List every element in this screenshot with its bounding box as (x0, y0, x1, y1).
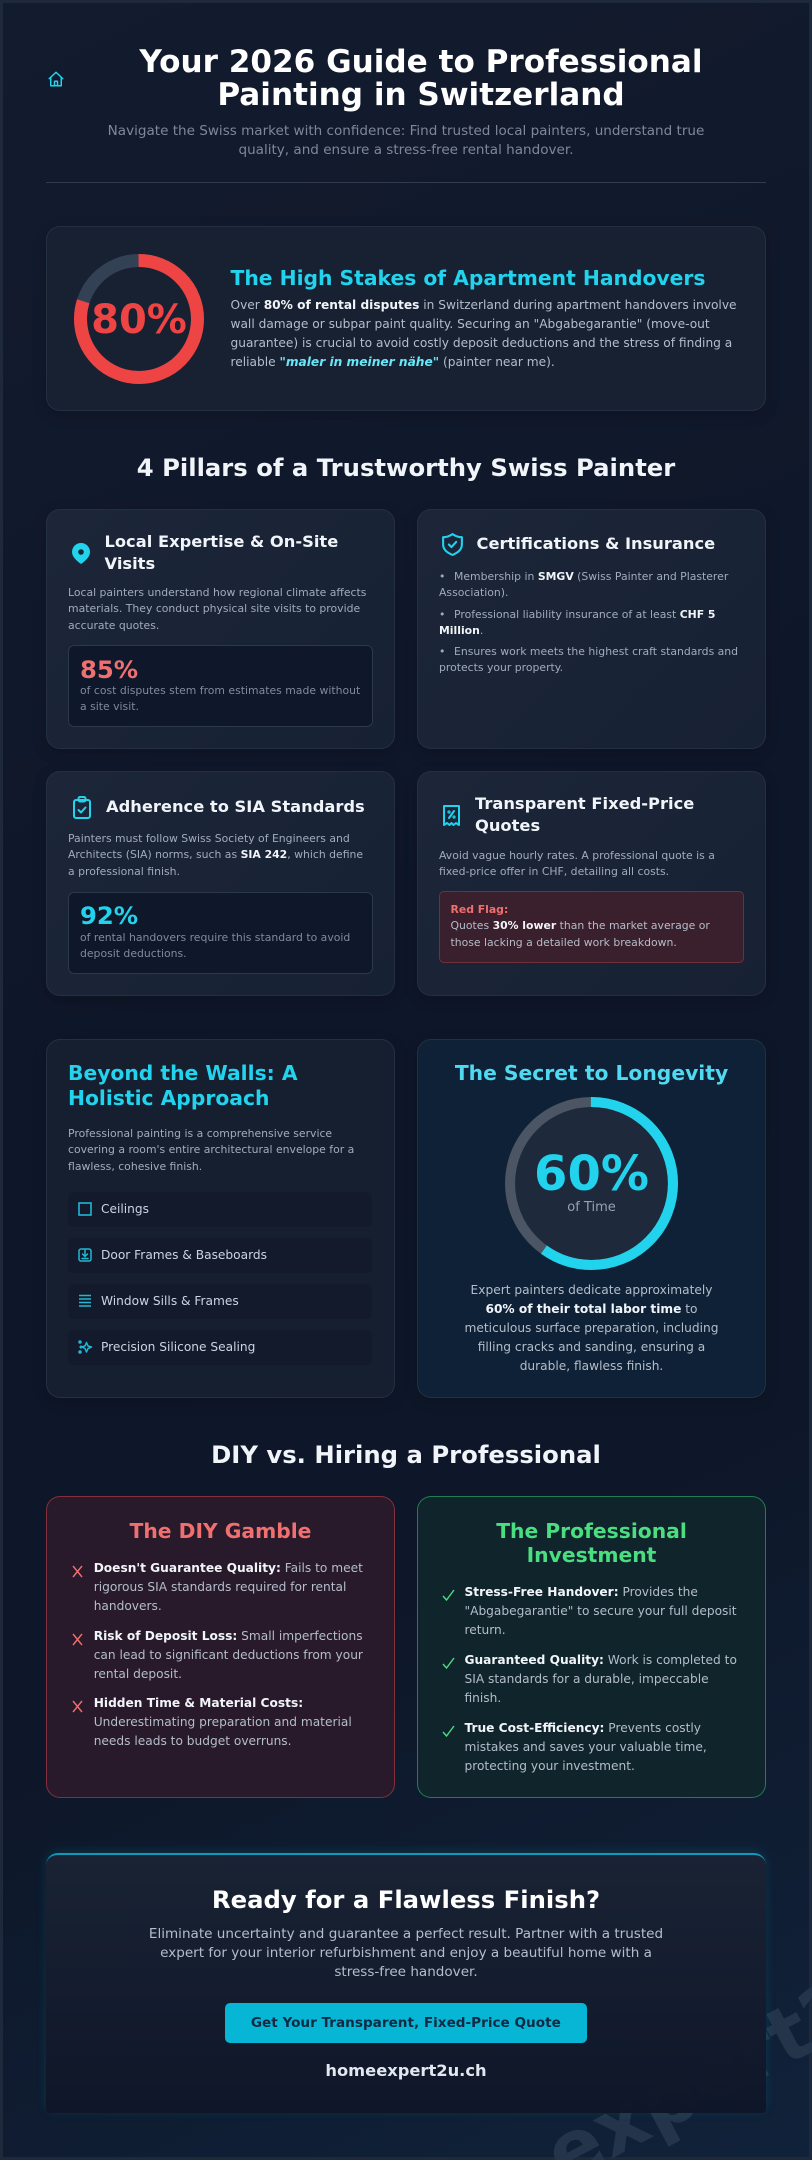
donut chart: 80%: 80% (91, 297, 187, 343)
item: quality (442, 1653, 737, 1705)
heading: Quotes (475, 816, 540, 835)
item: deposit (72, 1628, 363, 1680)
text block: Professional painting is a comprehensive service (68, 1127, 332, 1140)
heading: The Secret to Longevity (455, 1060, 728, 1084)
subtitle: quality, and ensure a stress-free rental handover. (238, 142, 574, 158)
callout: red flag: Red Flag: (450, 903, 508, 916)
callout: red flag: those lacking a detailed work breakdown. (450, 936, 677, 949)
panel: beyond the walls (46, 1039, 395, 1398)
list (439, 570, 738, 674)
caption: of rental handovers require this standard to avoid (80, 931, 350, 944)
caption: of Time (567, 1200, 616, 1215)
text: Risk of Deposit Loss: Small imperfections (94, 1628, 363, 1642)
list item: ceilings (68, 1192, 372, 1226)
text (94, 1561, 363, 1613)
icon: ceiling (78, 1202, 92, 1216)
text: Hidden Time & Material Costs: (94, 1696, 303, 1710)
icon: sparkle (78, 1340, 92, 1354)
list: Ensures work meets the highest craft standards and (454, 645, 738, 658)
list item: window sills (68, 1284, 372, 1318)
text: rigorous SIA standards required for rental (94, 1580, 346, 1594)
text block (46, 1925, 766, 1982)
text block: accurate quotes. (68, 619, 159, 632)
icon: check (442, 1658, 454, 1669)
icon: check (442, 1590, 454, 1601)
list item: silicone sealing (68, 1330, 372, 1364)
text: mistakes and saves your valuable time, (464, 1740, 707, 1754)
text block (68, 832, 363, 878)
caption (80, 931, 350, 960)
label: Ceilings (101, 1202, 149, 1216)
text block: Expert painters dedicate approximately (471, 1283, 712, 1297)
panel: call to action (46, 1853, 766, 2113)
panel: secret to longevity (417, 1039, 766, 1398)
text: Doesn't Guarantee Quality: Fails to meet (94, 1561, 363, 1575)
text: return. (464, 1623, 506, 1637)
list: • (439, 608, 445, 621)
text block (465, 1283, 718, 1373)
panel: local expertise (46, 509, 395, 749)
text block (439, 848, 715, 878)
text: rental deposit. (94, 1666, 182, 1680)
icon: receipt percent (443, 805, 460, 826)
text: Stress-Free Handover: Provides the (464, 1585, 698, 1599)
callout: red flag (439, 891, 744, 963)
text block: filling cracks and sanding, ensuring a (478, 1340, 705, 1354)
text: Underestimating preparation and material (94, 1715, 352, 1729)
icon: door (78, 1248, 92, 1262)
icon: cross (72, 1700, 82, 1712)
panel: SIA standards (46, 771, 395, 996)
panel: fixed-price quotes (417, 771, 766, 996)
text: can lead to significant deductions from your (94, 1648, 363, 1662)
label: Precision Silicone Sealing (101, 1340, 255, 1354)
panel: certifications (417, 509, 766, 749)
heading (475, 794, 694, 835)
text: Guaranteed Quality: Work is completed to (464, 1653, 737, 1667)
text: protecting your investment. (464, 1758, 635, 1772)
list item: door frames (68, 1238, 372, 1272)
item: handover (442, 1585, 737, 1637)
heading: Local Expertise & On-Site (104, 532, 338, 551)
icon: home (48, 72, 64, 86)
panel: high stakes (46, 226, 766, 411)
heading: Visits (104, 554, 155, 573)
item: cost (417, 1718, 766, 1776)
number: 92% (80, 901, 138, 930)
subtitle: Navigate the Swiss market with confidence: Find trusted local painters, understand true (108, 123, 704, 139)
title (139, 44, 703, 112)
stat box: 92% (68, 892, 373, 974)
list: Association). (439, 586, 508, 599)
text block: Over 80% of rental disputes in Switzerland during apartment handovers involve (230, 298, 737, 312)
caption: a site visit. (80, 700, 139, 713)
text block: durable, flawless finish. (520, 1359, 663, 1373)
big number: 60% (534, 1146, 649, 1202)
heading: Ready for a Flawless Finish? (212, 1885, 600, 1914)
callout: red flag: Quotes 30% lower than the market average or (450, 919, 710, 932)
caption: of cost disputes stem from estimates made without (80, 684, 360, 697)
icon: clipboard check (73, 796, 91, 819)
item: hidden costs (72, 1696, 352, 1748)
list: • (439, 570, 445, 583)
text block: stress-free handover. (334, 1964, 478, 1980)
text: handovers. (94, 1599, 162, 1613)
text: needs leads to budget overruns. (94, 1734, 292, 1748)
text block: Architects (SIA) norms, such as SIA 242, which define (68, 848, 363, 861)
number: 85% (80, 654, 138, 684)
icon: cross (72, 1634, 82, 1646)
heading: pillars: 4 Pillars of a Trustworthy Swiss Painter (137, 453, 675, 482)
text block: flawless, cohesive finish. (68, 1160, 202, 1173)
list: • (439, 645, 445, 658)
text block: guarantee) is crucial to avoid costly deposit deductions and the stress of finding a (230, 336, 732, 350)
text block (68, 586, 366, 632)
label: Window Sills & Frames (101, 1294, 239, 1308)
heading (104, 532, 338, 573)
text (464, 1585, 737, 1637)
text block: reliable "maler in meiner nähe" (painter near me). (230, 354, 555, 368)
heading (496, 1518, 687, 1567)
icon: window lines (79, 1294, 91, 1307)
donut chart: 80% (74, 254, 204, 384)
text block: a professional finish. (68, 865, 180, 878)
caption: deposit deductions. (80, 947, 187, 960)
panel: professional investment (417, 1496, 766, 1798)
text (464, 1651, 737, 1708)
heading: DIY vs pro: DIY vs. Hiring a Professional (211, 1440, 601, 1469)
button (225, 2003, 587, 2043)
stat box: 85% (68, 645, 373, 727)
text block: wall damage or subpar paint quality. Securing an "Abgabegarantie" (move-out (230, 316, 710, 330)
title: Your 2026 Guide to Professional (139, 44, 703, 80)
text block: 60% of their total labor time to (485, 1302, 698, 1316)
heading: Investment (527, 1543, 656, 1567)
ring chart: 60% (505, 1097, 678, 1270)
text block: meticulous surface preparation, including (465, 1321, 718, 1335)
heading: Transparent Fixed-Price (475, 794, 694, 813)
text block: Eliminate uncertainty and guarantee a perfect result. Partner with a trusted (149, 1926, 663, 1942)
icon: check (442, 1724, 455, 1736)
text block (68, 1127, 354, 1173)
text: True Cost-Efficiency: Prevents costly (464, 1720, 701, 1734)
list: Professional liability insurance of at least CHF 5 (454, 608, 715, 621)
title: Painting in Switzerland (217, 76, 625, 112)
heading: Holistic Approach (68, 1086, 269, 1110)
text (94, 1628, 363, 1680)
heading: Beyond the Walls: A (68, 1061, 298, 1085)
label: Door Frames & Baseboards (101, 1248, 267, 1262)
list: Million. (439, 624, 483, 637)
item: quality (72, 1561, 363, 1613)
heading: The Professional (496, 1518, 687, 1542)
caption (80, 684, 360, 713)
heading: Certifications & Insurance (476, 534, 715, 553)
text: SIA standards for a durable, impeccable (464, 1672, 709, 1686)
text block: covering a room's entire architectural envelope for a (68, 1143, 354, 1156)
text block (230, 298, 737, 368)
heading: Adherence to SIA Standards (106, 797, 365, 816)
text: finish. (464, 1691, 501, 1705)
panel: DIY gamble (46, 1496, 395, 1798)
text block: Painters must follow Swiss Society of Engineers and (68, 832, 350, 845)
icon: map pin (72, 543, 90, 564)
text block: expert for your interior refurbishment and enjoy a beautiful home with a (160, 1945, 652, 1961)
list: protects your property. (439, 661, 563, 674)
heading: The DIY Gamble (130, 1518, 311, 1542)
subtitle (108, 123, 704, 158)
heading (68, 1061, 298, 1110)
heading: The High Stakes of Apartment Handovers (230, 266, 705, 290)
text block: Local painters understand how regional climate affects (68, 586, 366, 599)
website: homeexpert2u.ch (325, 2061, 487, 2080)
button: Get Your Transparent, Fixed-Price Quote (251, 2015, 561, 2031)
icon: cross (72, 1566, 82, 1578)
text (464, 1718, 707, 1776)
text (94, 1696, 352, 1748)
text block: fixed-price offer in CHF, detailing all costs. (439, 865, 669, 878)
text: "Abgabegarantie" to secure your full deposit (464, 1604, 737, 1618)
text block: Avoid vague hourly rates. A professional quote is a (439, 848, 715, 862)
list: Membership in SMGV (Swiss Painter and Plasterer (454, 570, 728, 583)
text block: materials. They conduct physical site visits to provide (68, 602, 360, 615)
icon: shield check (442, 533, 463, 556)
